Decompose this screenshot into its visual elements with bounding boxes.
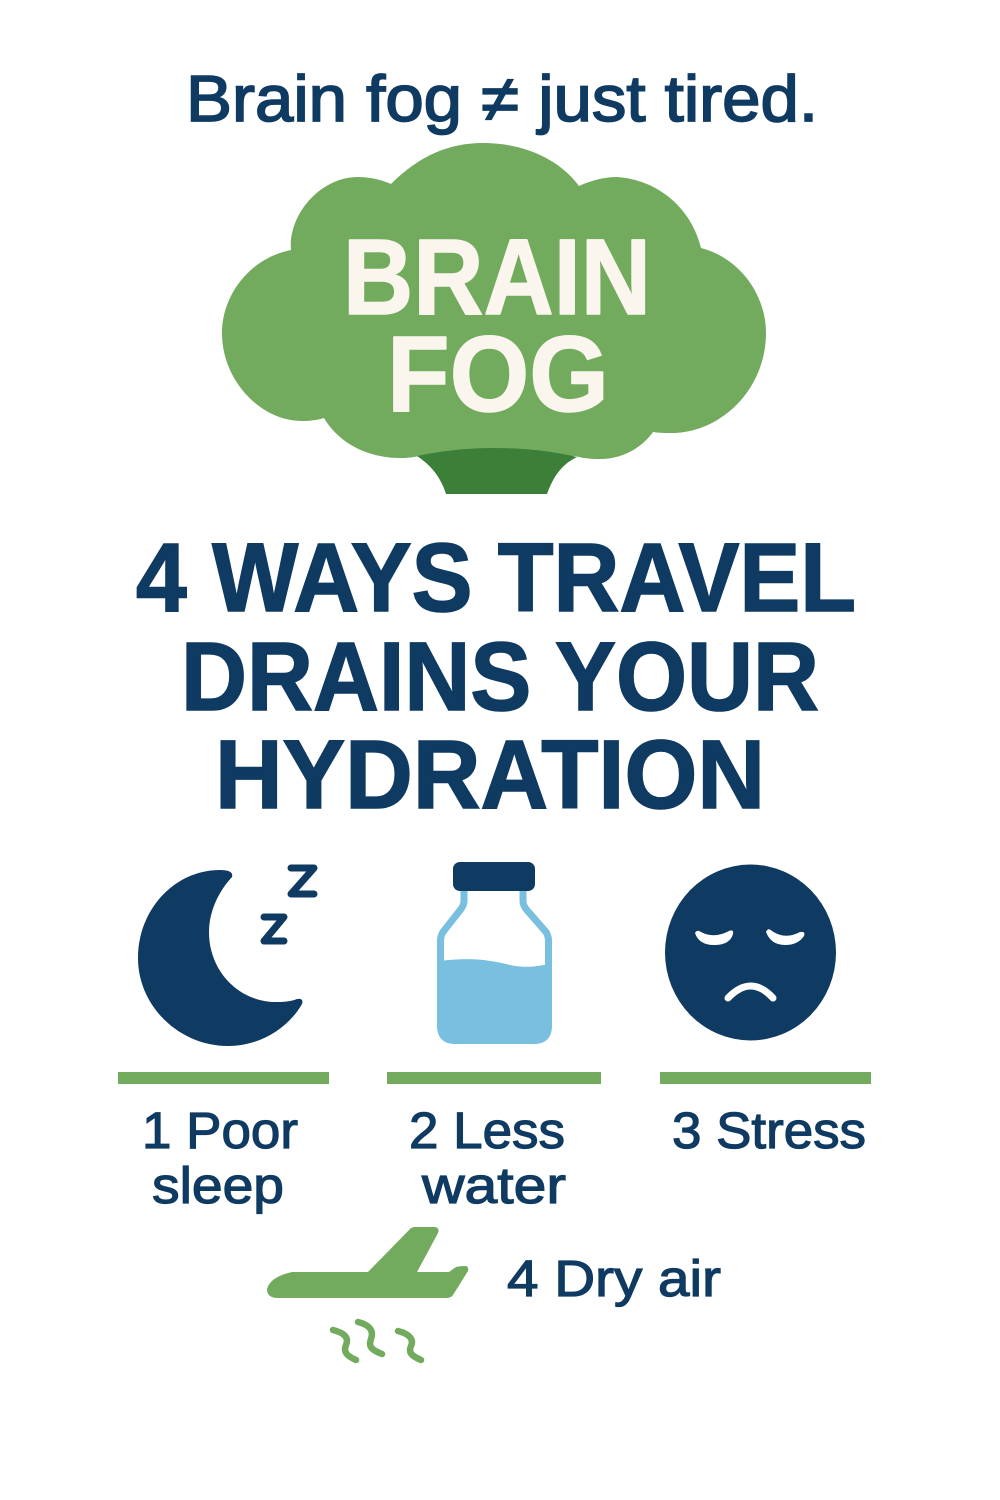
main heading [136, 523, 856, 829]
main heading: DRAINS YOUR [181, 622, 819, 731]
main heading: 4 WAYS TRAVEL [136, 523, 856, 632]
icon: water bottle [440, 862, 549, 1041]
icon: airplane with dry air waves [267, 1227, 468, 1360]
label: way four: 4 Dry air [507, 1250, 721, 1307]
main heading: HYDRATION [215, 720, 765, 829]
labels for ways one to three: water [421, 1157, 566, 1214]
icon: green brain fog cloud [222, 143, 766, 494]
cloud label: BRAIN [343, 216, 651, 337]
labels for ways one to three: sleep [152, 1157, 284, 1214]
cloud label second line: FOG [387, 313, 609, 434]
labels for ways one to three [142, 1102, 866, 1214]
labels for ways one to three: 3 Stress [672, 1102, 866, 1159]
green divider bars [118, 1072, 871, 1084]
labels for ways one to three: 2 Less [409, 1102, 565, 1159]
subtitle: brain fog is not just tired: Brain fog ≠ just tired. [186, 62, 818, 135]
icon: moon with z letters [138, 868, 314, 1046]
labels for ways one to three: 1 Poor [142, 1102, 298, 1159]
icon: sad face [665, 864, 836, 1040]
